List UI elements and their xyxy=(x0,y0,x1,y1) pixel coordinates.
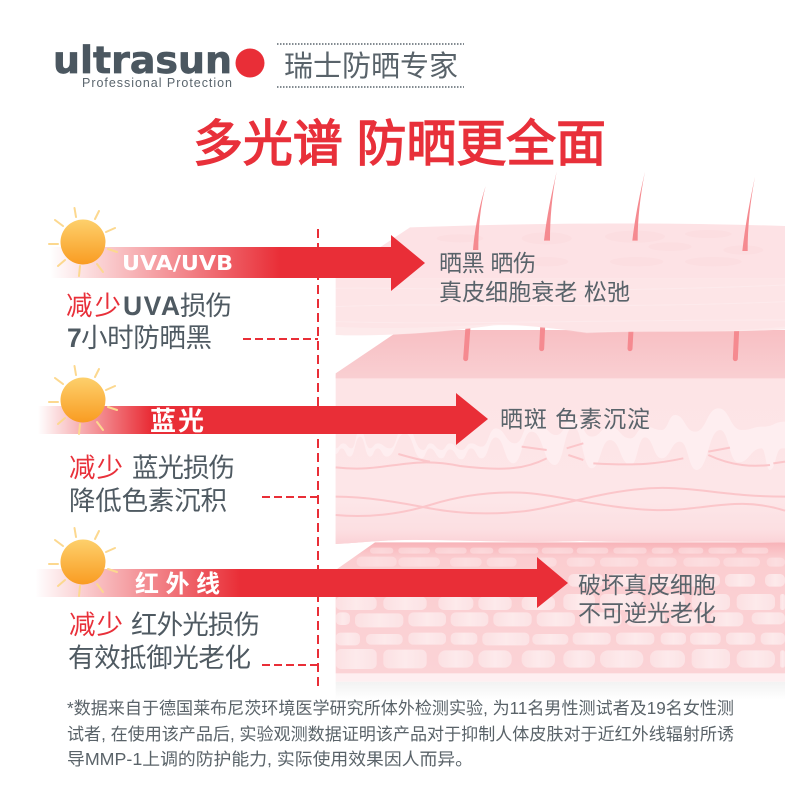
title: 多光谱 防晒更全面 xyxy=(193,116,606,172)
dashed connector lines xyxy=(243,229,318,688)
text block: 蓝光: 降低色素沉积 xyxy=(69,486,227,516)
sun icon 1 xyxy=(49,208,117,276)
tagline: 瑞士防晒专家: 瑞士防晒专家 xyxy=(284,50,458,83)
sun icon 2 xyxy=(49,366,117,434)
text block: UVA xyxy=(66,291,232,353)
text block: UVA: 损伤 xyxy=(180,291,232,321)
text block: 红外线 xyxy=(68,610,260,673)
effect: 蓝光: 晒斑 色素沉淀 xyxy=(500,406,650,432)
arrow: 红外线: 红外线 xyxy=(135,571,220,598)
effect: UVA xyxy=(439,250,630,305)
footnote: 试者, 在使用该产品后, 实验观测数据证明该产品对于抑制人体皮肤对于近红外线辐射所诱 xyxy=(67,724,734,744)
arrow: UVA/UVB xyxy=(50,235,425,291)
arrow: 红外线 xyxy=(35,557,568,608)
effect: 红外线 xyxy=(578,572,716,626)
text block: UVA: UVA xyxy=(123,291,180,321)
skin illustration xyxy=(336,172,785,700)
effect: UVA: 晒黑 晒伤 xyxy=(439,250,536,276)
effect: 红外线: 破坏真皮细胞 xyxy=(578,572,716,598)
footnote: *数据来自于德国莱布尼茨环境医学研究所体外检测实验, 为11名男性测试者及19名女性测 xyxy=(67,698,734,718)
arrow: 蓝光 xyxy=(38,393,488,445)
skin layer: dermis xyxy=(336,375,785,544)
arrow: UVA/UVB: UVA/UVB xyxy=(122,251,233,275)
text block: UVA: 小时防晒黑 xyxy=(81,323,212,353)
arrow: 蓝光: 蓝光 xyxy=(150,406,204,436)
footnote xyxy=(67,698,734,769)
logo: ultrasun: ultrasun xyxy=(53,39,232,82)
text block: 蓝光 xyxy=(69,453,235,516)
logo: ultrasun: Professional Protection xyxy=(82,76,232,90)
footnote: 导MMP-1上调的防护能力, 实际使用效果因人而异。 xyxy=(67,749,473,769)
tagline: 瑞士防晒专家 xyxy=(277,44,464,87)
text block: UVA: 7 xyxy=(67,323,82,353)
text block: 蓝光: 蓝光损伤 xyxy=(132,453,235,483)
text block: UVA: 减少 xyxy=(66,291,121,321)
skin layer: cells xyxy=(336,542,785,700)
sun icon 3 xyxy=(49,528,117,596)
text block: 红外线: 减少 xyxy=(69,610,123,640)
text block: 红外线: 有效抵御光老化 xyxy=(68,643,251,673)
text block: 红外线: 红外光损伤 xyxy=(131,610,260,640)
effect: 红外线: 不可逆光老化 xyxy=(578,600,716,626)
skin layer: top surface xyxy=(336,172,785,378)
effect: UVA: 真皮细胞衰老 松弛 xyxy=(439,279,630,305)
text block: 蓝光: 减少 xyxy=(69,453,123,483)
logo: ultrasun xyxy=(53,39,264,90)
